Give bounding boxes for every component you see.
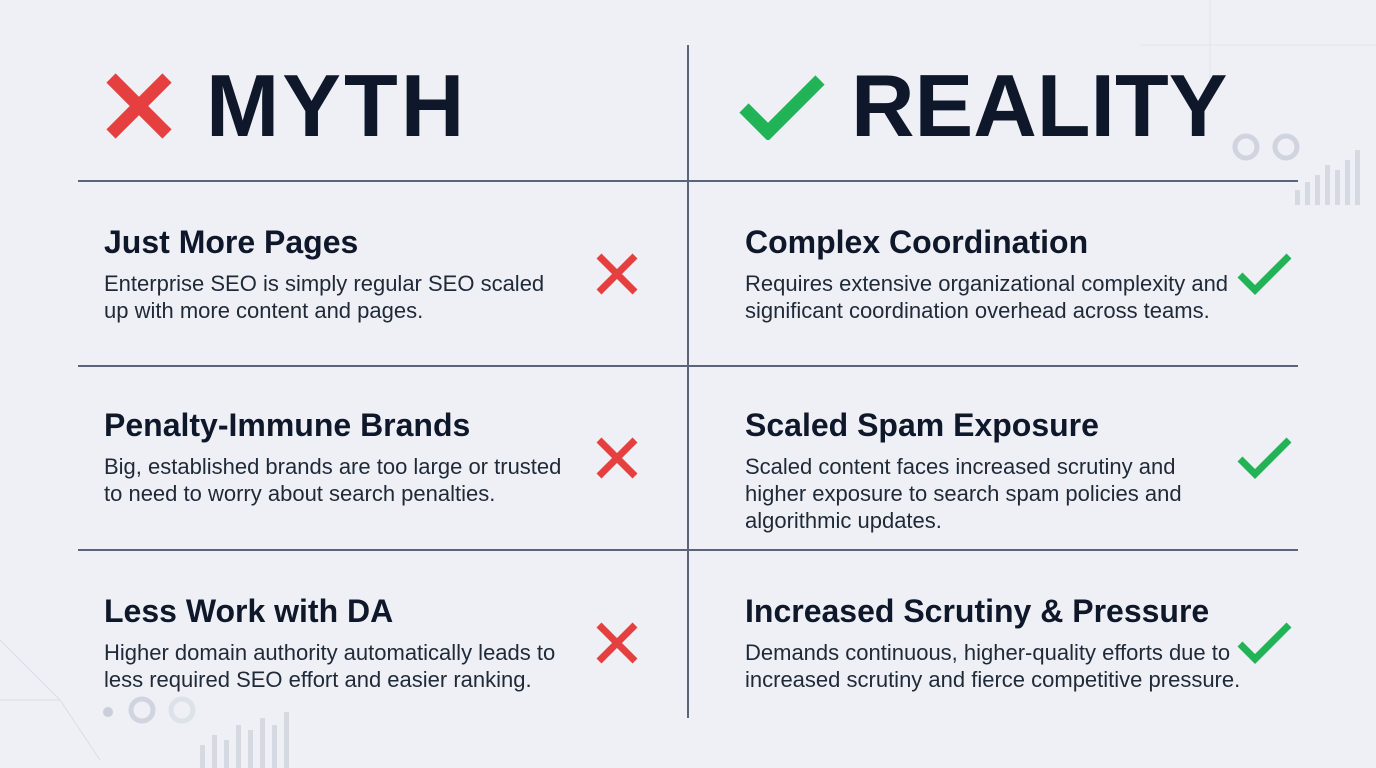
icon: red x (596, 438, 638, 478)
panel: myth 1: Just More Pages (104, 224, 358, 260)
panel: reality 3: increased scrutiny and fierce competitive pressure. (745, 667, 1240, 692)
panel: reality 2: higher exposure to search spam policies and (745, 481, 1182, 506)
panel: reality 2: Scaled Spam Exposure (745, 407, 1099, 443)
panel: myth 3: less required SEO effort and easier ranking. (104, 667, 532, 692)
header: myth (106, 56, 467, 155)
panel: myth 3: Higher domain authority automatically leads to (104, 640, 555, 665)
panel: reality 1 (745, 224, 1292, 323)
panel: reality 2 (745, 407, 1292, 533)
icon: red x (596, 254, 638, 294)
panel: myth 1 (104, 224, 638, 323)
panel: myth 2: Big, established brands are too large or trusted (104, 454, 561, 479)
icon: red x (106, 73, 172, 139)
panel: myth 2: Penalty-Immune Brands (104, 407, 470, 443)
panel: myth 1: up with more content and pages. (104, 298, 423, 323)
header: reality (740, 56, 1227, 155)
divider lines (687, 45, 688, 718)
myth heading: MYTH (206, 56, 467, 155)
icon: green check (1238, 254, 1292, 295)
icon: green check (1238, 622, 1292, 664)
panel: myth 2 (104, 407, 638, 506)
panel: reality 3 (745, 593, 1292, 692)
icon: green check (740, 75, 824, 140)
panel: reality 1: significant coordination overhead across teams. (745, 298, 1210, 323)
panel: reality 1: Requires extensive organizational complexity and (745, 271, 1228, 296)
panel: reality 1: Complex Coordination (745, 224, 1088, 260)
icon: red x (596, 622, 638, 664)
panel: reality 2: algorithmic updates. (745, 508, 942, 533)
panel: reality 2: Scaled content faces increased scrutiny and (745, 454, 1175, 479)
icon: green check (1238, 438, 1292, 479)
panel: myth 3 (104, 593, 638, 692)
panel: myth 3: Less Work with DA (104, 593, 393, 629)
panel: reality 3: Demands continuous, higher-quality efforts due to (745, 640, 1230, 665)
reality heading: REALITY (851, 56, 1227, 155)
panel: reality 3: Increased Scrutiny & Pressure (745, 593, 1209, 629)
panel: myth 1: Enterprise SEO is simply regular SEO scaled (104, 271, 544, 296)
panel: myth 2: to need to worry about search penalties. (104, 481, 495, 506)
